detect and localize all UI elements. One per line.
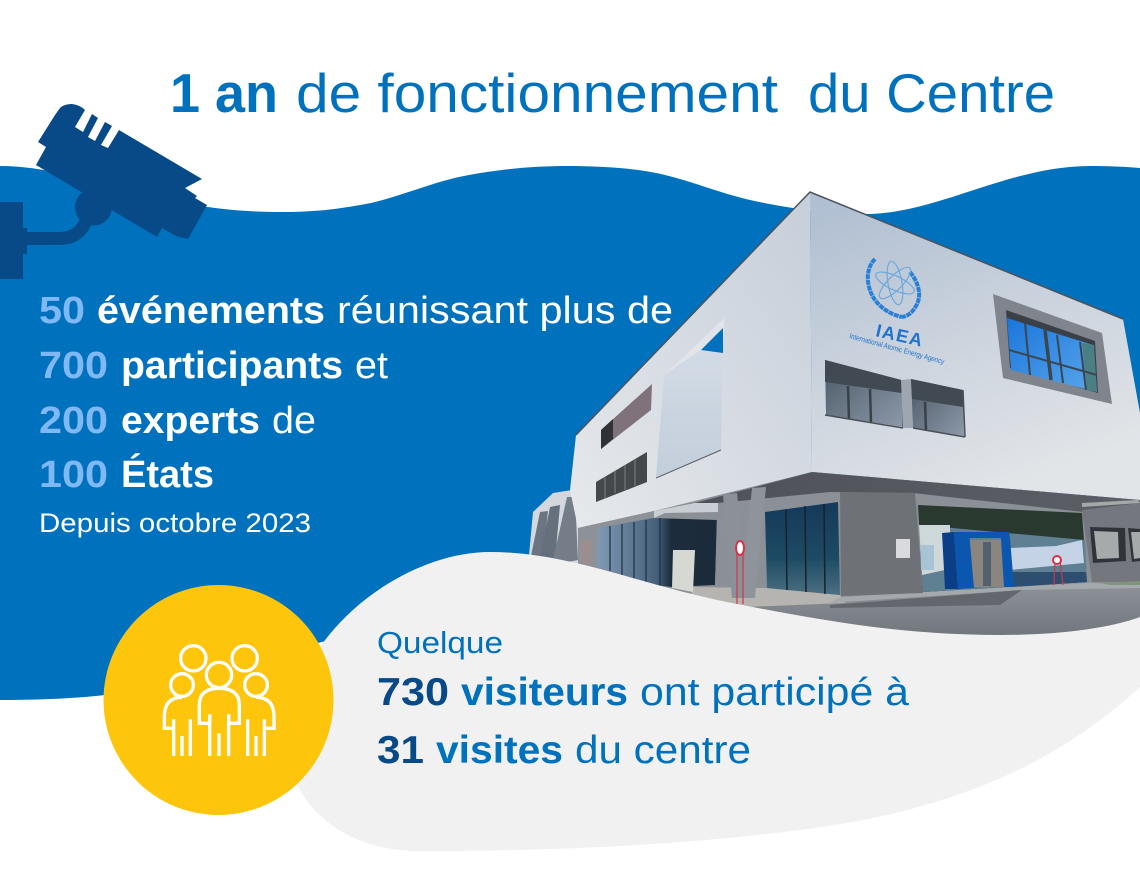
line: Quelque: Quelque: [377, 625, 503, 660]
light recess: [654, 503, 718, 518]
line: 50 événements: 50: [39, 290, 85, 332]
grass: [1100, 581, 1140, 585]
line: 730 visiteurs: ont participé à: [640, 671, 909, 714]
utility box: [672, 550, 695, 592]
text block: events statistics: [39, 290, 673, 538]
right building windows: [1090, 527, 1140, 563]
plaque: [896, 539, 910, 558]
icon: group of people: [164, 646, 274, 756]
pavement strip: [830, 583, 1140, 603]
title: de fonctionnement: [296, 62, 778, 124]
pillars: [723, 493, 747, 598]
sign: [736, 541, 744, 555]
right sign: [1053, 556, 1063, 585]
IAEA logo: [868, 259, 919, 317]
sign pole: [737, 550, 743, 604]
title: [170, 62, 1055, 124]
base fill behind ground floor: [578, 472, 1140, 640]
side door: [580, 540, 592, 565]
line: 31 visites: 31: [377, 729, 424, 772]
lower left wall: [578, 511, 654, 567]
roof edge: [576, 192, 1123, 435]
line: 200 experts: experts: [121, 400, 260, 442]
line: since October 2023: Depuis octobre 2023: [39, 508, 311, 538]
line: 31 visites: du centre: [575, 729, 751, 772]
opening in wall: [656, 318, 724, 478]
title: 1 an: [170, 62, 278, 124]
blue wave background: [0, 166, 1140, 700]
line: 730 visiteurs: 730: [377, 671, 449, 714]
central wall: [840, 492, 923, 596]
window: front left: [825, 360, 903, 428]
ground floor: [578, 472, 1140, 604]
photo: IAEA building: [528, 192, 1140, 640]
reflection: [919, 525, 1087, 587]
yellow circle: [104, 585, 334, 815]
blue porch: [942, 532, 1014, 589]
line: 200 experts: 200: [39, 400, 108, 442]
line: 730 visiteurs: [377, 671, 909, 714]
road shadow: [830, 590, 1022, 608]
left glass: [597, 518, 717, 587]
front wall: [810, 192, 1140, 500]
line: 700 participants: participants: [121, 345, 343, 387]
window: front right: [911, 379, 965, 437]
grey wave panel: [295, 552, 1140, 851]
left wall windows: [596, 384, 652, 502]
right glass: [918, 505, 1087, 592]
text block: visitors: [377, 625, 909, 772]
right building: [1082, 503, 1140, 582]
line: 31 visites: [377, 729, 751, 772]
title: du Centre: [808, 62, 1055, 124]
line: 100 États: États: [121, 452, 214, 496]
central glass: [765, 502, 840, 595]
icon: security camera: [0, 104, 207, 279]
line: 100 États: 100: [39, 454, 108, 496]
umbrellas: [528, 490, 590, 575]
line: 730 visiteurs: visiteurs: [461, 671, 628, 714]
pier between windows: [901, 379, 913, 428]
IAEA name: IAEA: [874, 320, 924, 350]
overhang strip: [1082, 500, 1140, 507]
line: 50 événements: réunissant plus de: [337, 290, 673, 332]
gravel: [690, 587, 845, 607]
grey pier: [715, 512, 767, 588]
line: 200 experts: de: [272, 400, 316, 442]
line: 700 participants: [39, 345, 388, 387]
window: framed upper right: [993, 294, 1112, 404]
IAEA name: [848, 320, 946, 366]
line: 31 visites: visites: [436, 729, 563, 772]
line: 700 participants: et: [355, 345, 388, 387]
line: 50 événements: événements: [97, 290, 325, 332]
soffit: [695, 472, 1140, 512]
line: 200 experts: [39, 400, 316, 442]
IAEA name: International Atomic Energy Agency: [848, 331, 946, 366]
line: 700 participants: 700: [39, 345, 108, 387]
left wall: [570, 192, 812, 528]
line: 100 États: [39, 452, 214, 496]
line: 50 événements: [39, 290, 673, 332]
ground: [693, 582, 1140, 640]
